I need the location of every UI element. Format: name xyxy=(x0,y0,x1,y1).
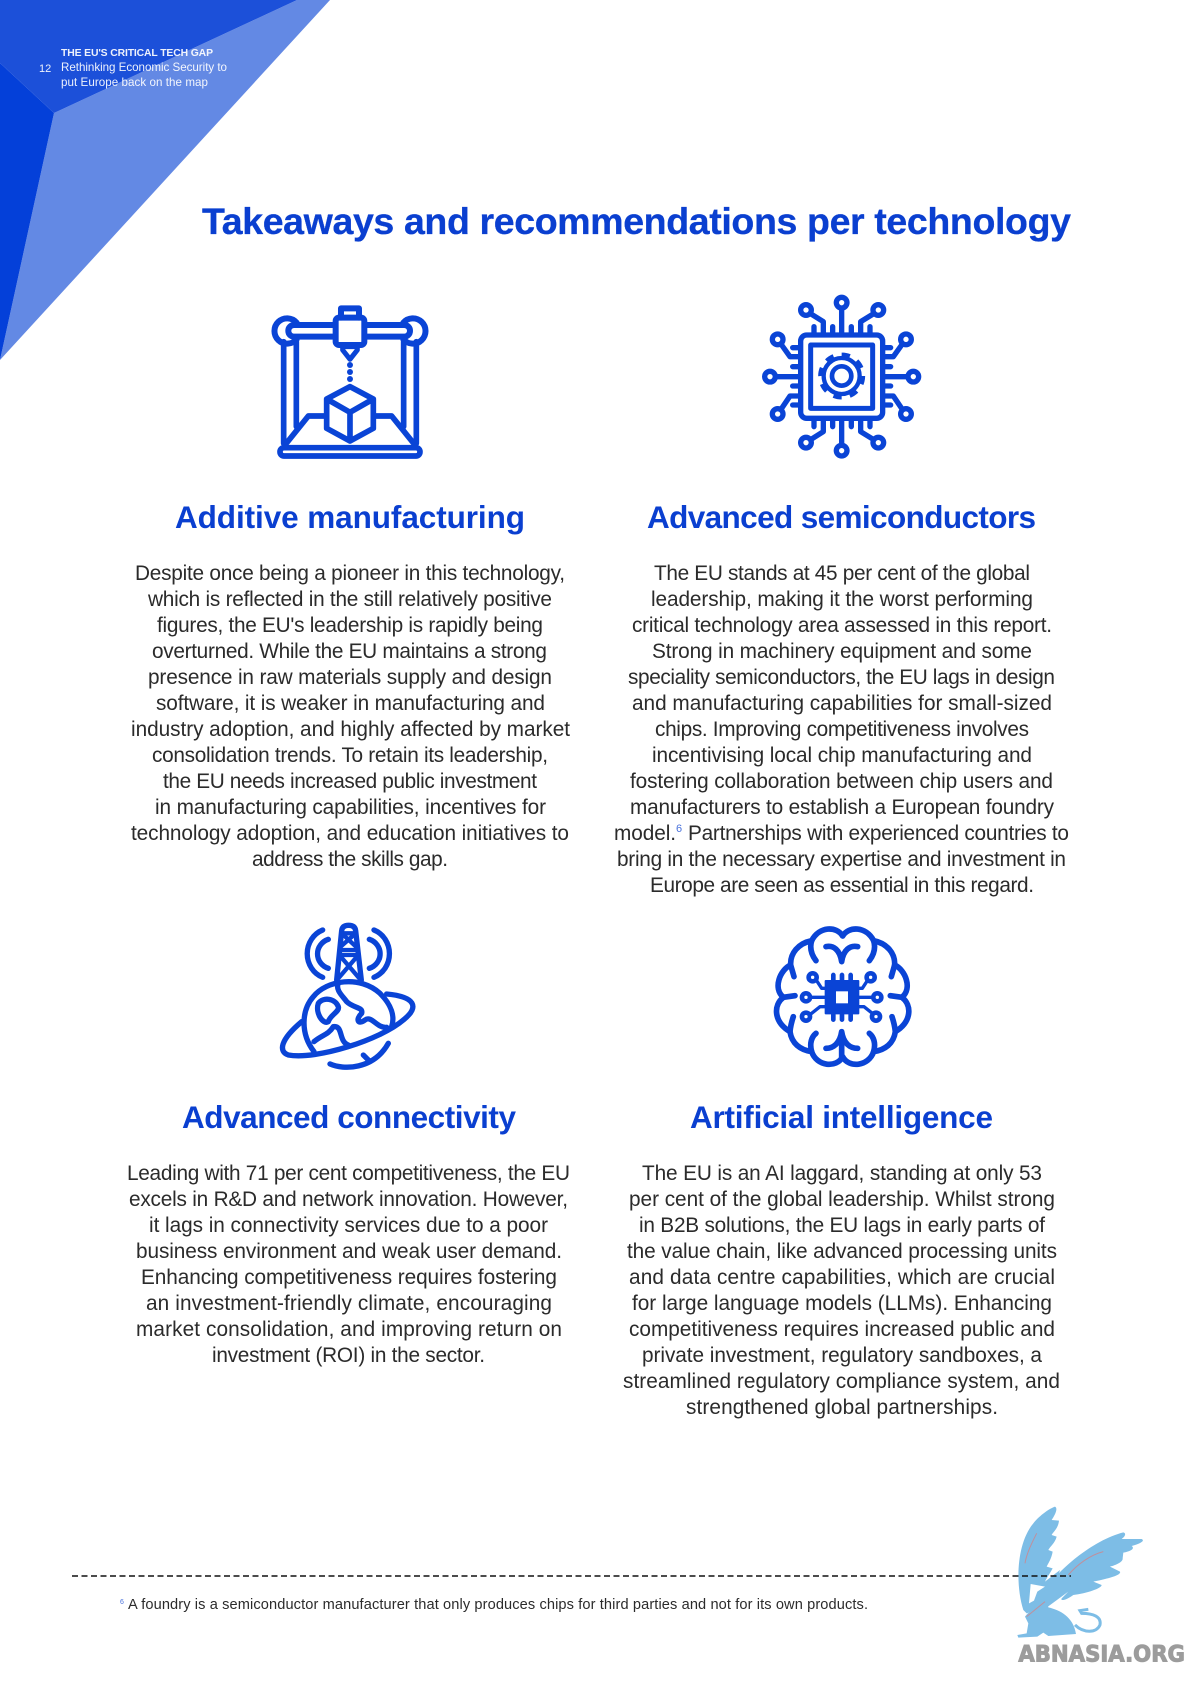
heading: Advanced semiconductors xyxy=(647,499,1036,535)
body text: speciality semiconductors, the EU lags in design xyxy=(628,666,1055,689)
body text: overturned. While the EU maintains a strong xyxy=(152,640,547,663)
body text: bring in the necessary expertise and investment in xyxy=(617,848,1066,871)
body text: manufacturers to establish a European foundry xyxy=(630,796,1055,819)
body text: fostering collaboration between chip users and xyxy=(630,770,1053,793)
body text: consolidation trends. To retain its leadership, xyxy=(152,744,548,767)
body text: critical technology area assessed in this report. xyxy=(632,614,1052,637)
heading: Artificial intelligence xyxy=(690,1099,993,1135)
heading: Additive manufacturing xyxy=(175,499,525,535)
footnote rule xyxy=(72,1575,1071,1577)
body text: figures, the EU's leadership is rapidly being xyxy=(157,614,543,637)
body text: investment (ROI) in the sector. xyxy=(212,1344,485,1367)
running header: THE EU'S CRITICAL TECH GAP xyxy=(61,48,213,59)
body text: business environment and weak user demand. xyxy=(136,1240,562,1263)
heading: Advanced connectivity xyxy=(182,1099,516,1135)
body text: industry adoption, and highly affected by market xyxy=(131,718,570,741)
panel: additive manufacturing xyxy=(131,308,570,871)
body text: Strong in machinery equipment and some xyxy=(652,640,1032,663)
footnote: 6 xyxy=(120,1599,124,1606)
body text: excels in R&D and network innovation. However, xyxy=(129,1188,568,1211)
body text: software, it is weaker in manufacturing and xyxy=(156,692,545,715)
body text: the EU needs increased public investment xyxy=(163,770,537,793)
body text: the value chain, like advanced processing units xyxy=(627,1240,1057,1263)
body text: address the skills gap. xyxy=(252,848,448,871)
icon: 3D printer xyxy=(274,308,426,456)
body text: per cent of the global leadership. Whilst strong xyxy=(629,1188,1055,1211)
body text: in B2B solutions, the EU lags in early parts of xyxy=(639,1214,1045,1237)
body text: it lags in connectivity services due to a poor xyxy=(149,1214,548,1237)
body text: technology adoption, and education initiatives to xyxy=(131,822,569,845)
body text: Enhancing competitiveness requires fostering xyxy=(141,1266,557,1289)
running header: put Europe back on the map xyxy=(61,76,208,89)
icon: brain with chip xyxy=(777,929,909,1064)
body text: which is reflected in the still relatively positive xyxy=(147,588,552,611)
body text: Leading with 71 per cent competitiveness, the EU xyxy=(127,1162,570,1185)
body text: in manufacturing capabilities, incentives for xyxy=(155,796,546,819)
body text: 6 xyxy=(676,823,682,835)
body text: an investment-friendly climate, encouraging xyxy=(146,1292,552,1315)
body text: chips. Improving competitiveness involves xyxy=(655,718,1029,741)
body text xyxy=(131,562,570,871)
body text: competitiveness requires increased public and xyxy=(629,1318,1055,1341)
body text xyxy=(127,1162,570,1367)
icon: chip with gear xyxy=(765,297,919,456)
running header: 12 xyxy=(39,63,51,75)
icon: tower and globe xyxy=(282,925,413,1067)
body text: Europe are seen as essential in this regard. xyxy=(650,874,1034,897)
body text: model. xyxy=(614,822,676,845)
running header xyxy=(39,48,227,89)
body text: Despite once being a pioneer in this technology, xyxy=(135,562,565,585)
panel: advanced semiconductors xyxy=(614,297,1069,897)
title: Takeaways and recommendations per technology xyxy=(202,200,1071,242)
body text: The EU is an AI laggard, standing at only 53 xyxy=(642,1162,1042,1185)
body text: streamlined regulatory compliance system, and xyxy=(623,1370,1060,1393)
body text: for large language models (LLMs). Enhancing xyxy=(632,1292,1052,1315)
footnote: A foundry is a semiconductor manufacturer that only produces chips for third parties and not for its own products. xyxy=(128,1597,868,1613)
body text xyxy=(623,1162,1060,1419)
body text: presence in raw materials supply and design xyxy=(148,666,552,689)
body text: The EU stands at 45 per cent of the global xyxy=(654,562,1030,585)
body text: leadership, making it the worst performing xyxy=(651,588,1033,611)
watermark: griffin logo xyxy=(1017,1507,1185,1668)
body text: and manufacturing capabilities for small-sized xyxy=(632,692,1052,715)
panel: advanced connectivity xyxy=(127,925,570,1367)
body text: incentivising local chip manufacturing and xyxy=(652,744,1032,767)
body text: private investment, regulatory sandboxes, a xyxy=(642,1344,1042,1367)
body text: market consolidation, and improving return on xyxy=(136,1318,562,1341)
running header: Rethinking Economic Security to xyxy=(61,61,227,74)
watermark: griffin logo: ABNASIA.ORG xyxy=(1018,1643,1185,1668)
body text: strengthened global partnerships. xyxy=(686,1396,998,1419)
body text: Partnerships with experienced countries to xyxy=(688,822,1069,845)
body text: and data centre capabilities, which are crucial xyxy=(629,1266,1055,1289)
body text xyxy=(614,562,1069,897)
panel: artificial intelligence xyxy=(623,929,1060,1419)
corner decoration: blue polygons xyxy=(0,0,330,360)
